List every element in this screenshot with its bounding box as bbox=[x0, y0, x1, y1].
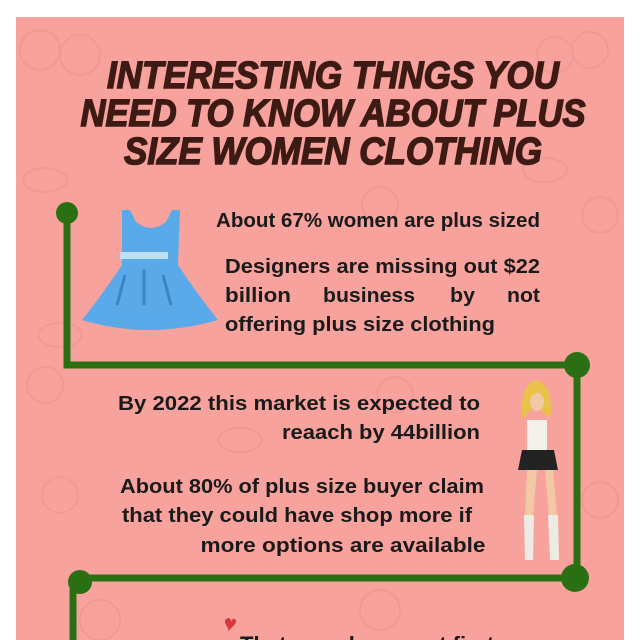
title: INTERESTING THNGS YOU bbox=[107, 55, 560, 97]
icon: blue dress bbox=[82, 210, 218, 330]
text block 1: billion bbox=[225, 285, 291, 307]
icon: woman figure bbox=[518, 380, 559, 560]
title: NEED TO KNOW ABOUT PLUS bbox=[80, 93, 586, 135]
text block 1: business bbox=[323, 285, 415, 307]
text block 1: not bbox=[507, 285, 540, 307]
text block 2: that they could have shop more if bbox=[122, 505, 472, 527]
title bbox=[80, 55, 586, 173]
timeline connector bbox=[67, 213, 577, 640]
text block 2: By 2022 this market is expected to bbox=[118, 393, 480, 415]
text block 2: more options are available bbox=[200, 535, 486, 557]
title: SIZE WOMEN CLOTHING bbox=[124, 131, 542, 173]
text block 1 bbox=[216, 210, 540, 336]
text block 1: Designers are missing out $22 bbox=[225, 256, 540, 278]
text block 1: About 67% women are plus sized bbox=[216, 210, 540, 232]
text block 2: About 80% of plus size buyer claim bbox=[120, 476, 484, 498]
text block 2 bbox=[118, 393, 486, 557]
text block 2: reaach by 44billion bbox=[282, 422, 480, 444]
text block 1: offering plus size clothing bbox=[225, 314, 495, 336]
text block 1: by bbox=[450, 285, 476, 307]
icon: heart bbox=[225, 618, 236, 631]
